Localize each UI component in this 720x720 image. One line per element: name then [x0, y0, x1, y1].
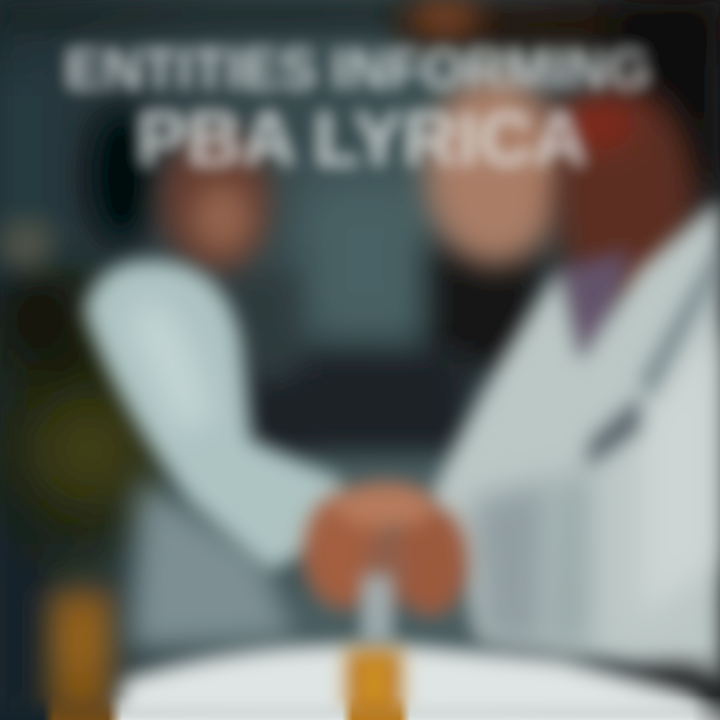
woman in background — [85, 105, 350, 650]
medicine bottle — [346, 575, 402, 720]
doctor — [400, 0, 720, 705]
title line 1: ENTITIES INFORMING — [66, 37, 650, 100]
plant and left foreground — [0, 223, 150, 720]
bottom edge colour strip — [0, 695, 720, 720]
table — [115, 644, 715, 720]
title line 2: PBA LYRICA — [137, 97, 587, 182]
clasped hands — [303, 483, 468, 615]
title — [66, 37, 650, 182]
